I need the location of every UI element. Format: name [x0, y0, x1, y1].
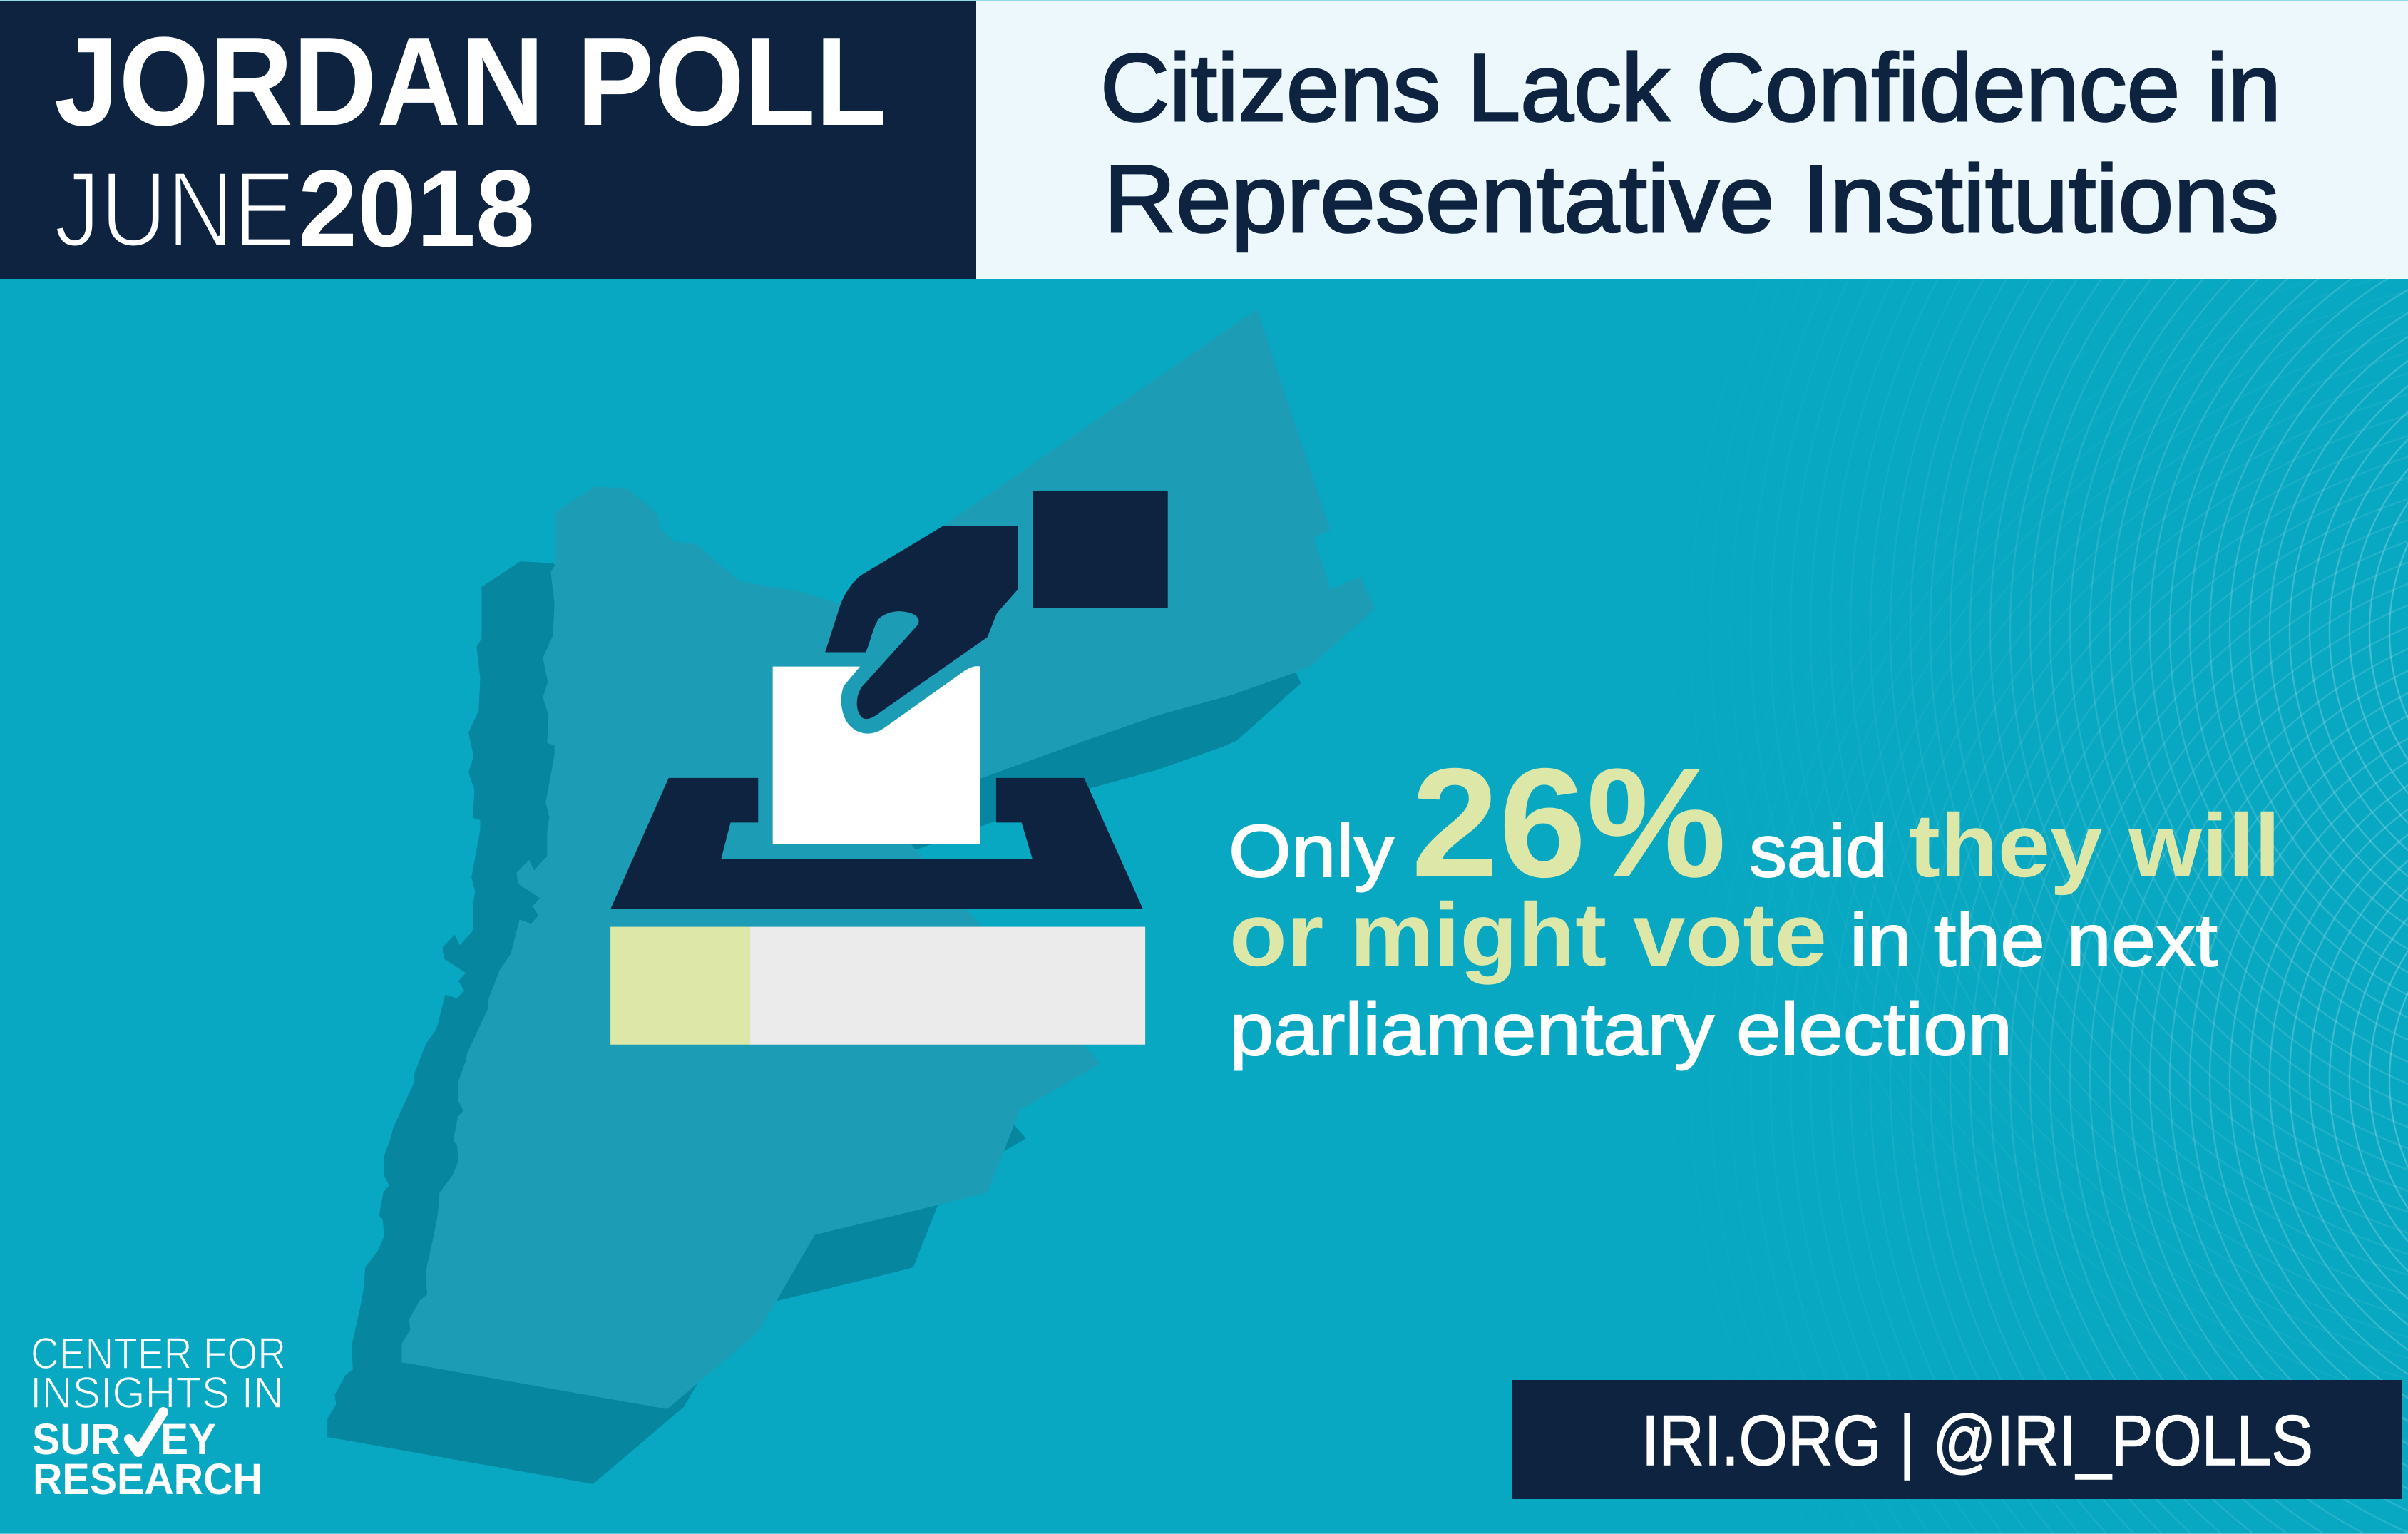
subtitle line 1: Citizens Lack Confidence in [1100, 35, 2281, 141]
icon: hand [825, 526, 1018, 719]
logo text: Center for: CENTER FOR [31, 1329, 286, 1379]
callout line 1: said [1749, 810, 1887, 893]
logo text: Sur: SUR [32, 1415, 121, 1463]
callout line 1: they will [1909, 795, 2280, 896]
heading: June: JUNE [54, 149, 295, 269]
header: poll title panel [0, 1, 976, 279]
heading: 2018: 2018 [298, 148, 535, 270]
map of Jordan [401, 309, 1375, 1409]
heading: Jordan Poll: JORDAN POLL [54, 11, 886, 152]
icon: ballot paper square [1033, 491, 1168, 608]
ballot box body bar: 26 percent segment [610, 927, 750, 1045]
footer: website and handle bar [1512, 1380, 2402, 1499]
callout line 2 [1229, 884, 2218, 985]
map shadow [327, 384, 1301, 1484]
icon: check mark [129, 1412, 163, 1452]
footer: website and handle bar: IRI.ORG | @IRI_POLLS [1641, 1401, 2313, 1480]
icon: ballot box lid [610, 778, 1143, 909]
logo: Center for Insights in Survey Research [30, 1329, 286, 1503]
logo text: Research: RESEARCH [33, 1455, 262, 1503]
big number: 26%: 26% [1411, 737, 1726, 910]
logo text: Insights in: INSIGHTS IN [30, 1369, 284, 1418]
callout line 2: or might vote [1229, 884, 1827, 985]
icon: ballot paper [773, 666, 980, 844]
logo text: Ey: EY [160, 1415, 216, 1463]
callout line 3: parliamentary election [1229, 988, 2012, 1071]
callout line 1 [1229, 737, 2280, 910]
header: subtitle panel [976, 0, 2408, 279]
callout line 2: in the next [1850, 899, 2218, 982]
callout: 26 percent statement [1229, 737, 2280, 1071]
ballot box body bar: remainder [750, 927, 1145, 1045]
callout line 1: Only [1229, 810, 1394, 893]
subtitle line 2: Representative Institutions [1104, 146, 2279, 252]
map of Jordan and ballot box illustration [327, 309, 1375, 1484]
